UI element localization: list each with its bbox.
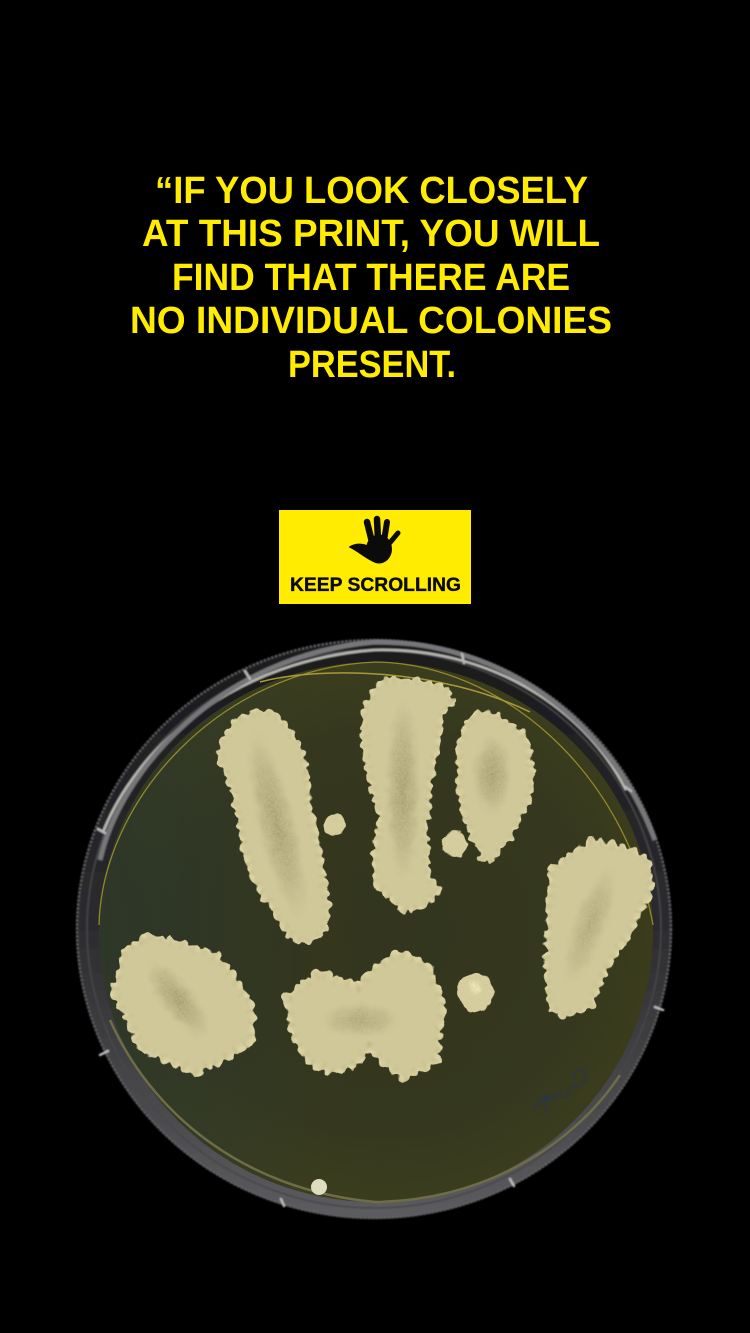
colony: finger print 2 bbox=[364, 680, 453, 910]
dish rim bbox=[76, 639, 672, 1219]
small colonies bbox=[324, 814, 494, 1012]
quote heading: AT THIS PRINT, YOU WILL bbox=[142, 213, 600, 255]
quote heading: NO INDIVIDUAL COLONIES bbox=[130, 300, 612, 342]
white disc bbox=[311, 1179, 327, 1195]
agar bbox=[99, 662, 653, 1202]
colony: finger print 1 bbox=[220, 712, 327, 943]
icon: raised hand bbox=[350, 519, 398, 564]
colony: thumb print bbox=[547, 842, 650, 1018]
quote heading: FIND THAT THERE ARE bbox=[172, 257, 570, 299]
rim tabs bbox=[98, 654, 663, 1206]
colony: finger print 3 bbox=[459, 713, 531, 860]
badge label: KEEP SCROLLING bbox=[290, 574, 461, 596]
handwritten marker label bbox=[534, 1069, 586, 1112]
quote heading bbox=[130, 170, 612, 386]
petri dish bbox=[76, 639, 672, 1219]
keep scrolling badge bbox=[279, 510, 471, 604]
quote heading: PRESENT. bbox=[288, 344, 456, 386]
colony: palm left bbox=[113, 937, 251, 1072]
quote heading: “IF YOU LOOK CLOSELY bbox=[155, 170, 588, 212]
colony: palm centre bbox=[288, 953, 443, 1077]
